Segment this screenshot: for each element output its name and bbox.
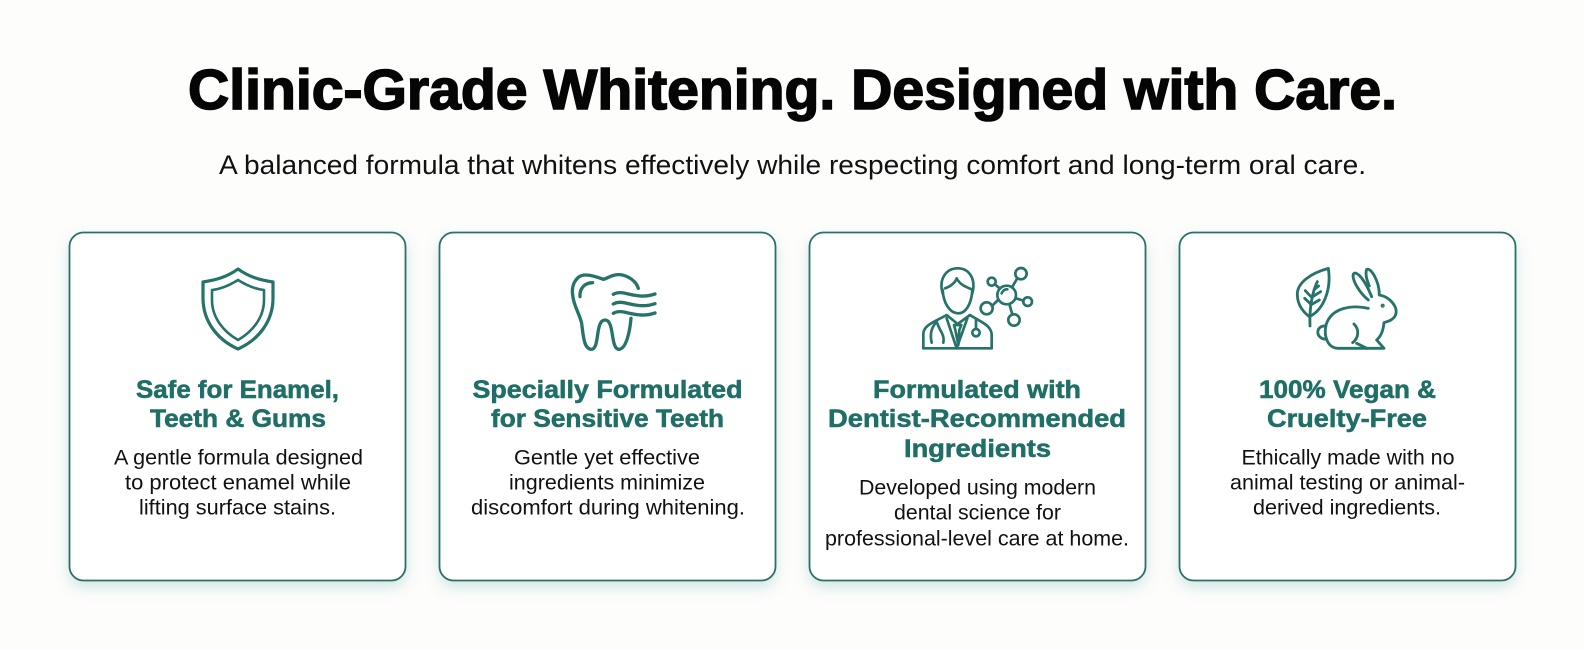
body text: Developed using modern [859, 476, 1096, 500]
body text [471, 446, 745, 520]
panel: sensitive teeth [440, 232, 776, 580]
body text: professional-level care at home. [825, 528, 1129, 550]
card background [440, 232, 776, 580]
body text: lifting surface stains. [139, 496, 336, 520]
body text: to protect enamel while [125, 472, 351, 494]
panel: safe for enamel [70, 232, 406, 580]
title: Clinic-Grade Whitening. Designed with Care. [188, 58, 1397, 122]
icon: tooth with waves [572, 275, 655, 349]
body text: discomfort during whitening. [471, 496, 745, 520]
body text [1230, 446, 1465, 520]
body text: dental science for [894, 502, 1061, 524]
icon: leaf and rabbit [1297, 268, 1396, 348]
body text: A gentle formula designed [114, 446, 363, 470]
body text: animal testing or animal- [1230, 472, 1465, 494]
heading [136, 376, 339, 433]
heading: 100% Vegan & [1259, 376, 1436, 404]
heading: Specially Formulated [472, 376, 742, 404]
panel: dentist recommended [810, 232, 1146, 580]
card background [1180, 232, 1516, 580]
body text: Gentle yet effective [514, 446, 700, 470]
panel: vegan and cruelty free [1180, 232, 1516, 580]
body text: derived ingredients. [1253, 496, 1441, 520]
body text: ingredients minimize [509, 472, 705, 494]
body text: Ethically made with no [1242, 446, 1454, 470]
heading [472, 376, 742, 433]
subtitle: A balanced formula that whitens effectively while respecting comfort and long-term oral care. [219, 150, 1366, 180]
heading [1259, 376, 1436, 433]
heading: Cruelty-Free [1267, 405, 1427, 433]
heading: Teeth & Gums [150, 405, 326, 433]
heading: for Sensitive Teeth [491, 405, 724, 433]
card background [810, 232, 1146, 580]
heading: Ingredients [904, 435, 1051, 463]
card background [70, 232, 406, 580]
icon: dentist and molecule [923, 268, 1032, 348]
icon: shield [203, 269, 273, 349]
heading: Formulated with [873, 376, 1081, 404]
heading [828, 376, 1126, 463]
body text [825, 476, 1129, 550]
body text [114, 446, 363, 520]
heading: Safe for Enamel, [136, 376, 339, 404]
heading: Dentist-Recommended [828, 405, 1126, 433]
